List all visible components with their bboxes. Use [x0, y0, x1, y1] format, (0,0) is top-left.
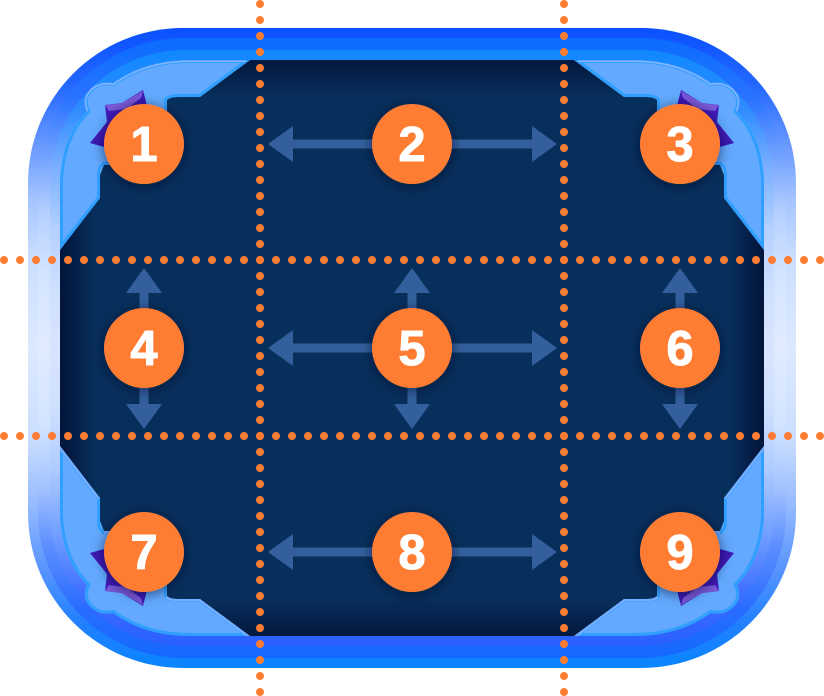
arrows: region 6 vertical: [662, 268, 698, 429]
arrows: region 8 horizontal: [268, 534, 557, 570]
badge 6: 6: [666, 322, 694, 376]
arrows: region 2 horizontal: [268, 126, 557, 162]
badge 5: 5: [398, 322, 426, 376]
badge 2: [372, 104, 452, 184]
corner ornament: bottom right: [574, 446, 764, 636]
badge 2: 2: [398, 118, 426, 172]
badge 4: [104, 308, 184, 388]
badge 8: [372, 512, 452, 592]
badge 4: 4: [130, 322, 158, 376]
badge 9: 9: [666, 526, 694, 580]
badge 7: 7: [130, 526, 158, 580]
badge 1: 1: [130, 118, 158, 172]
badge 5: [372, 308, 452, 388]
badge 9: [640, 512, 720, 592]
badge 6: [640, 308, 720, 388]
arrows: region 4 vertical: [126, 268, 162, 429]
corner ornament: bottom left: [60, 446, 250, 636]
badge 1: [104, 104, 184, 184]
dark centre panel: [60, 60, 764, 636]
corner ornament: top left: [60, 60, 250, 250]
corner ornament: top right: [574, 60, 764, 250]
badge 8: 8: [398, 526, 426, 580]
badge 3: [640, 104, 720, 184]
badge 7: [104, 512, 184, 592]
arrows: region 5 horizontal and vertical: [268, 268, 557, 429]
badge 3: 3: [666, 118, 694, 172]
